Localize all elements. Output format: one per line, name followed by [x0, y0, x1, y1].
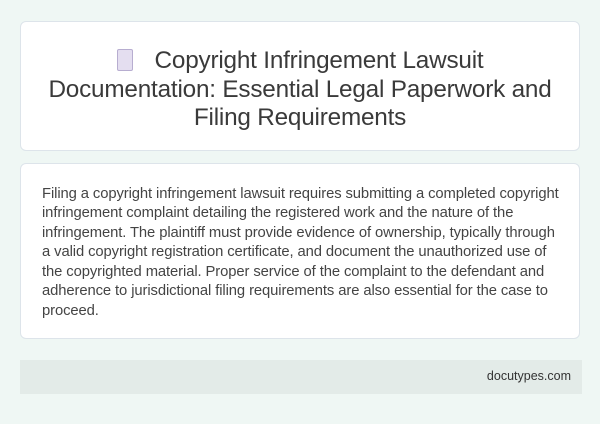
title card — [20, 21, 580, 151]
title card: Copyright Infringement Lawsuit — [155, 47, 483, 74]
description text card: Filing a copyright infringement lawsuit requires submitting a completed copyright — [42, 186, 559, 202]
footer: docutypes.com — [487, 369, 571, 383]
description text card: infringement. The plaintiff must provide evidence of ownership, typically through — [42, 225, 555, 241]
description text card: the copyrighted material. Proper service of the complaint to the defendant and — [42, 264, 544, 280]
description text card: adherence to jurisdictional filing requirements are also essential for the case to — [42, 283, 548, 299]
footer — [20, 360, 582, 394]
description text card: infringement complaint detailing the registered work and the nature of the — [42, 205, 513, 221]
description text card: a valid copyright registration certificate, and document the unauthorized use of — [42, 244, 546, 260]
icon: document scroll — [117, 49, 133, 71]
title card: Filing Requirements — [194, 104, 406, 131]
description text card — [20, 163, 580, 339]
title card: Documentation: Essential Legal Paperwork and — [48, 76, 552, 102]
description text card: proceed. — [42, 303, 99, 319]
